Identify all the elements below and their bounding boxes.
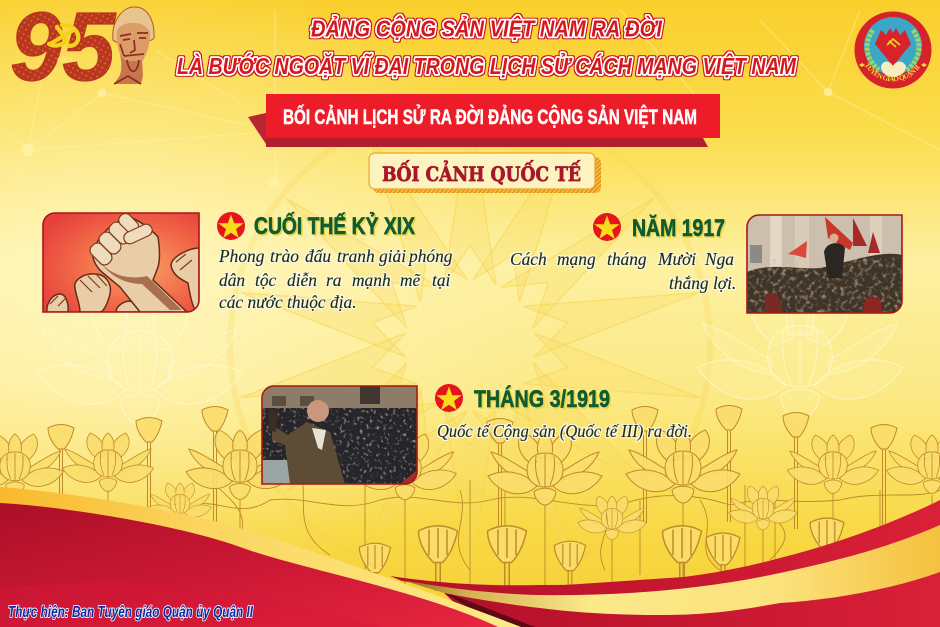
text block: giải bbox=[379, 246, 406, 266]
label nam: năm bbox=[57, 55, 73, 64]
text block: tháng bbox=[607, 249, 647, 269]
text block: mạng bbox=[557, 249, 596, 269]
text block: Phong bbox=[218, 246, 265, 266]
text block: tại bbox=[432, 270, 451, 290]
text block: Quốc tế Cộng sản (Quốc tế III) ra đời. bbox=[437, 421, 692, 441]
text block: Cách bbox=[510, 249, 547, 269]
title bbox=[177, 14, 797, 79]
heading: NĂM 1917 bbox=[632, 214, 725, 242]
text block: phóng bbox=[407, 246, 453, 266]
text block: mạnh bbox=[352, 270, 391, 290]
text block: tranh bbox=[337, 246, 375, 266]
image: October Revolution painting bbox=[747, 215, 902, 313]
red banner bbox=[248, 94, 720, 147]
panel: năm 1917 bbox=[510, 213, 902, 313]
image: raised fists bbox=[43, 211, 199, 312]
95 years logo bbox=[10, 0, 154, 101]
panel: cuối thế kỷ XIX bbox=[43, 211, 453, 312]
bottom right ribbons bbox=[390, 500, 940, 627]
text block: mẽ bbox=[400, 270, 422, 290]
icon: star bbox=[217, 212, 245, 240]
text block: Mười bbox=[657, 249, 696, 269]
image: Lenin addressing crowd bbox=[262, 386, 417, 484]
heading: CUỐI THẾ KỶ XIX bbox=[254, 211, 415, 240]
title: LÀ BƯỚC NGOẶT VĨ ĐẠI TRONG LỊCH SỬ CÁCH MẠNG VIỆT NAM bbox=[177, 52, 797, 79]
text block: ra bbox=[326, 270, 342, 290]
hammer and sickle bbox=[49, 25, 78, 46]
emblem: Tuyên giáo Quận II: TUYÊN GIÁO QUẬN II bbox=[865, 62, 920, 82]
text block: tộc bbox=[255, 270, 277, 290]
text block: thắng lợi. bbox=[669, 273, 736, 293]
text block: Nga bbox=[704, 249, 734, 269]
text block: các nước thuộc địa. bbox=[219, 292, 357, 312]
text block: đấu bbox=[305, 246, 331, 266]
bottom left ribbons bbox=[0, 487, 521, 627]
section badge bbox=[369, 153, 601, 193]
background: network lines bbox=[0, 10, 940, 210]
title: ĐẢNG CỘNG SẢN VIỆT NAM RA ĐỜI bbox=[311, 14, 663, 42]
red banner: BỐI CẢNH LỊCH SỬ RA ĐỜI ĐẢNG CỘNG SẢN VIỆT NAM bbox=[283, 105, 697, 129]
heading: THÁNG 3/1919 bbox=[474, 385, 610, 413]
panel: tháng 3/1919 bbox=[262, 384, 692, 484]
text block: trào bbox=[270, 246, 299, 266]
icon: star bbox=[435, 384, 463, 412]
section badge: BỐI CẢNH QUỐC TẾ bbox=[382, 159, 581, 186]
emblem: Tuyên giáo Quận II bbox=[854, 12, 932, 88]
icon: star bbox=[593, 213, 621, 241]
text block: diễn bbox=[287, 270, 317, 290]
portrait of President Ho Chi Minh bbox=[113, 7, 154, 84]
background: bronze drum star pattern bbox=[230, 105, 710, 585]
lotus illustration field bbox=[0, 406, 940, 595]
credit line: Thực hiện: Ban Tuyên giáo Quận ủy Quận II bbox=[8, 604, 253, 621]
background: pale lotus outlines bbox=[37, 288, 903, 424]
text block: dân bbox=[219, 270, 245, 290]
